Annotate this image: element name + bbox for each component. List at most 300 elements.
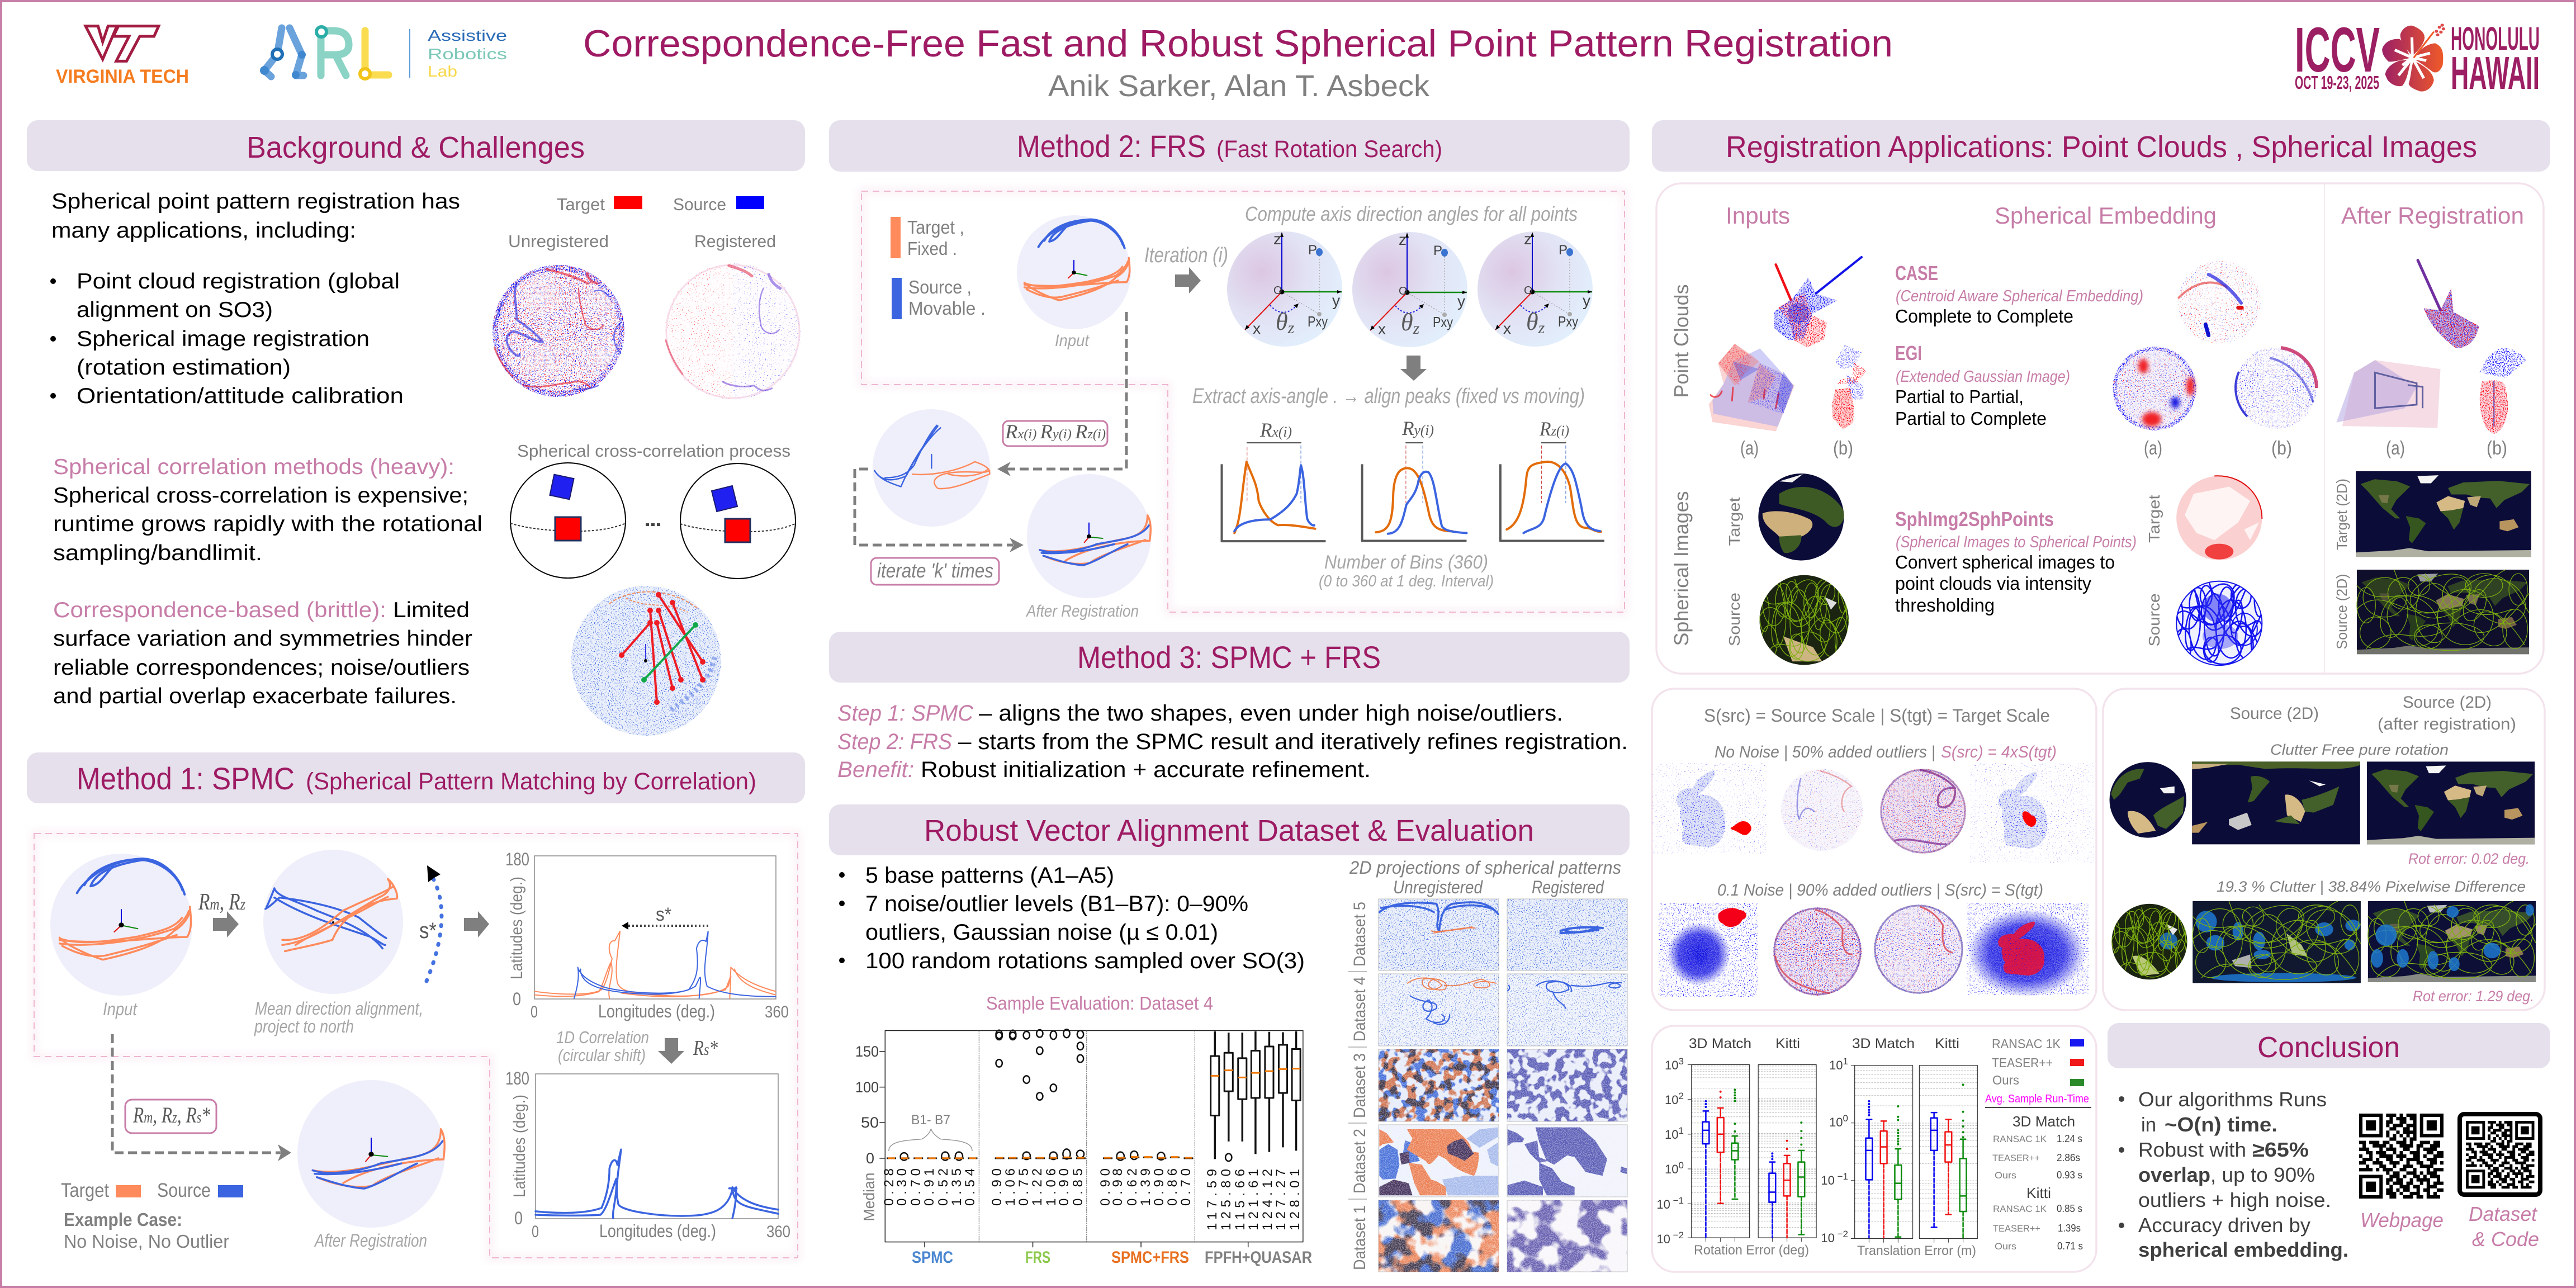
text block: spherical correlation methods: runtime grows rapidly with the rotational: [53, 512, 482, 536]
chart: longitudes after shift: Longitudes (deg.): [599, 1221, 716, 1241]
heading: method 2: Method 2: FRS: [1017, 129, 1206, 164]
CASE sphere: [2178, 261, 2261, 344]
heading: method 2: [829, 120, 1630, 172]
text block: correspondence-based: [53, 598, 472, 708]
text block: conclusion bullets: , up to 90%: [2210, 1163, 2315, 1186]
logo: Virginia Tech: [56, 26, 189, 87]
legend: target and source: Registered: [694, 231, 776, 251]
legend and run-time table: RANSAC 1K: [1993, 1134, 2047, 1144]
logo: Virginia Tech: VIRGINIA TECH: [56, 66, 189, 87]
panel: method 2 FRS: [829, 120, 1630, 621]
row 2: spheres: [1773, 905, 1963, 996]
legend and run-time table: RANSAC 1K: [1992, 1036, 2061, 1051]
axis sphere x: y: [1332, 292, 1340, 309]
heading: registration applications: [1652, 120, 2550, 172]
legend: target and source: Target: [557, 195, 605, 214]
rotation error plots: −1: [1670, 1195, 1684, 1206]
legend and example case: Example Case:: [64, 1209, 182, 1230]
column labels: [2230, 693, 2516, 733]
axis sphere z: Pxy: [1558, 313, 1578, 330]
box plot: median error by method: 0.52: [936, 1168, 951, 1206]
QR code: dataset and code: & Code: [2472, 1228, 2539, 1251]
heading: background and challenges: [27, 120, 805, 171]
heading: background and challenges: Background & Challenges: [247, 131, 585, 164]
heading: method 1: Method 1: SPMC: [77, 761, 295, 796]
panel: spherical image results: [2103, 689, 2545, 1010]
row labels: Target: [1726, 497, 1743, 546]
chart: longitudes before shift: 0: [513, 989, 521, 1009]
legend and example case: Source: [157, 1180, 211, 1201]
rotation error plots: 0: [1679, 1160, 1684, 1171]
box plot: median error by method: 150: [855, 1043, 879, 1060]
legend and run-time table: TEASER++: [1992, 1153, 2040, 1163]
logo: Assistive Robotics Lab: Assistive: [428, 27, 507, 44]
caption: noisy case: 0.1 Noise | 90% added outliers | S(src) = S(tgt): [1717, 881, 2043, 899]
arrow: down to histograms: [1400, 356, 1427, 381]
row 1: bunny input with outliers: [1652, 763, 1767, 854]
box plot: median error by method: 115.66: [1233, 1169, 1248, 1230]
box plot: median error by method: 0.30: [894, 1168, 910, 1206]
histograms of axis angles: Ry(i): [1401, 417, 1434, 439]
caption: number of bins: (0 to 360 at 1 deg. Interval): [1319, 572, 1494, 590]
text block: conclusion bullets: Our algorithms Runs: [2138, 1088, 2327, 1111]
text block: SphImg2SphPoints: thresholding: [1895, 595, 1995, 615]
histograms of axis angles: Rx(i): [1259, 419, 1292, 441]
text block: correspondence-based: reliable correspondences; noise/outliers: [53, 656, 470, 680]
legend: target and source: [508, 195, 776, 251]
rotation error plots: 10: [1665, 1162, 1679, 1176]
legend and example case: [61, 1180, 243, 1252]
sub-labels (a) and (b): (a): [2386, 438, 2405, 459]
heading: conclusion: Conclusion: [2257, 1031, 2400, 1064]
legend: target and source: Source: [673, 195, 726, 214]
legend and run-time table: RANSAC 1K: [1993, 1204, 2047, 1214]
EGI sphere (b): [2235, 347, 2317, 429]
axis sphere y: Pxy: [1433, 314, 1453, 330]
heading: robust vector alignment: Robust Vector Alignment Dataset & Evaluation: [924, 814, 1534, 847]
text block: steps: [837, 701, 1628, 782]
axis sphere y: z: [1413, 319, 1420, 338]
rot error 1.29: Rot error: 1.29 deg.: [2413, 988, 2534, 1005]
axis sphere z: y: [1583, 292, 1590, 309]
translation error plots: 10: [1821, 1231, 1835, 1245]
rotation error plots: 10: [1665, 1128, 1679, 1142]
row 2: noisy input: [1659, 903, 1758, 997]
arrow: dashed input to iteration: [997, 312, 1126, 476]
registered sphere: [665, 263, 801, 400]
axis sphere z: [1478, 230, 1593, 347]
sub-labels (a) and (b): (b): [1833, 438, 1853, 459]
translation error plots: Translation Error (m): [1857, 1243, 1976, 1258]
dataset 2 tiles: [1379, 1125, 1627, 1197]
applications frame: [1656, 183, 2544, 674]
translation error plots: −2: [1835, 1229, 1848, 1239]
dataset row labels: Dataset 3: [1351, 1053, 1369, 1118]
heading: method 3: Method 3: SPMC + FRS: [1077, 640, 1381, 675]
histograms of axis angles: [1221, 417, 1604, 541]
box plot: median error by method: FPFH+QUASAR: [1205, 1248, 1312, 1267]
caption: extract axis-angle: Extract axis-angle . → align peaks (fixed vs moving): [1192, 385, 1585, 408]
column headings: Spherical Embedding: [1995, 202, 2217, 229]
arrow: to axis spheres: [1175, 267, 1201, 293]
translation error plots: [1821, 1056, 1977, 1258]
legend and run-time table: 0.85 s: [2057, 1203, 2082, 1214]
legend: target fixed, source movable: Target ,: [907, 217, 964, 238]
dataset 3 tiles: [1379, 1049, 1627, 1121]
row 2: noisy bunny registered: [1967, 903, 2089, 997]
arrow: to correlation plot: [464, 911, 489, 937]
rotation error plots: 10: [1656, 1197, 1670, 1211]
axis sphere x: z: [1287, 319, 1295, 337]
QR code: dataset and code: Dataset: [2469, 1202, 2538, 1225]
dataset row labels: Dataset 4: [1351, 977, 1369, 1041]
row labels: Source: [1726, 593, 1743, 646]
axis sphere y: P: [1433, 243, 1442, 258]
column headings: After Registration: [2341, 202, 2524, 229]
cluttered registered map: [2368, 899, 2536, 983]
logo: ICCV 2025: OCT 19-23, 2025: [2295, 72, 2379, 93]
arrow: to mean alignment: [213, 911, 239, 937]
histograms of axis angles: Rz(i): [1539, 418, 1569, 440]
label: 1D correlation circular shift: (circular shift): [558, 1045, 646, 1065]
spherical cross-correlation diagram: Spherical cross-correlation process: [517, 441, 790, 461]
text block: dataset bullets: 100 random rotations sampled over SO(3): [865, 949, 1305, 973]
box plot: median error by method: 0.28: [882, 1168, 897, 1206]
box plot: median error by method: Median: [860, 1173, 878, 1221]
legend and run-time table: [1985, 1036, 2091, 1252]
box plot: median error by method: 117.59: [1205, 1169, 1220, 1230]
box plot: median error by method: FRS: [1025, 1248, 1050, 1267]
text block: SphImg2SphPoints: [1895, 508, 2137, 615]
text block: conclusion bullets: spherical embedding.: [2138, 1238, 2348, 1261]
chart title: Sample Evaluation: Dataset 4: [986, 993, 1213, 1014]
legend and run-time table: Ours: [1995, 1170, 2016, 1181]
box plot: median error by method: 0: [866, 1150, 874, 1167]
frame: [1652, 689, 2096, 1010]
text block: dataset bullets: 7 noise/outlier levels (B1–B7): 0–90%: [865, 892, 1248, 916]
row labels: Spherical Images: [1670, 491, 1693, 646]
row labels: Target (2D): [2333, 479, 2350, 550]
legend and run-time table: 3D Match: [2012, 1113, 2075, 1130]
text block: spherical correlation methods: sampling/bandlimit.: [53, 541, 262, 565]
text block: dataset bullets: 5 base patterns (A1–A5): [865, 863, 1114, 888]
heading: registration applications: Registration Applications: Point Clouds , Spherical Images: [1726, 130, 2477, 164]
text block: CASE: (Centroid Aware Spherical Embedding): [1896, 287, 2143, 305]
translation error plots: 10: [1829, 1058, 1843, 1072]
panel: background and challenges: [27, 120, 805, 736]
caption: 2D projections: [1349, 858, 1621, 897]
box plot: median error by method: 127.27: [1273, 1169, 1289, 1230]
text block: steps: Benefit:: [837, 757, 914, 782]
text block: steps: Robust initialization + accurate refinement.: [921, 757, 1371, 782]
after registration sphere: After Registration: [314, 1230, 427, 1251]
legend and run-time table: Avg. Sample Run-Time: [1985, 1093, 2089, 1105]
logo: Assistive Robotics Lab: [260, 27, 507, 80]
axis sphere z: P: [1559, 243, 1568, 258]
box plot: median error by method: 1.39: [1138, 1168, 1153, 1206]
row 1: spheres unregistered and registered: [1781, 769, 1966, 854]
rotation error plots: 3: [1679, 1056, 1684, 1067]
axis sphere x: [1227, 230, 1342, 347]
heading: method 1: (Spherical Pattern Matching by Correlation): [306, 768, 756, 795]
caption: clutter free: Clutter Free pure rotation: [2270, 741, 2449, 758]
input sphere: Input: [1055, 332, 1090, 350]
dashed process frame: [861, 191, 1625, 612]
rotation error plots: 10: [1665, 1093, 1679, 1107]
axis sphere z: θ: [1526, 308, 1538, 335]
text block: spherical correlation methods: [53, 455, 482, 565]
box plot: median error by method: 0.70: [1178, 1168, 1194, 1206]
text block: conclusion bullets: outliers + high noise.: [2138, 1188, 2331, 1211]
chart: longitudes before shift: Longitudes (deg.): [598, 1001, 715, 1021]
axis sphere z: z: [1538, 319, 1545, 337]
legend: target fixed, source movable: Source ,: [908, 277, 972, 297]
text block: steps: – starts from the SPMC result and iteratively refines registration.: [958, 730, 1628, 754]
QR code: dataset and code: [2460, 1114, 2540, 1251]
logo: Assistive Robotics Lab: Lab: [428, 63, 457, 80]
correspondence sphere with red and green match lines: [571, 586, 721, 736]
text block: CASE: Complete to Complete: [1895, 306, 2073, 326]
cluttered rotated map: [2193, 899, 2361, 983]
text block: conclusion bullets: ≥65%: [2252, 1138, 2309, 1161]
text block: correspondence-based: Limited: [393, 598, 470, 622]
panel: dataset and evaluation: [829, 804, 1630, 1272]
legend: target fixed, source movable: [891, 217, 986, 319]
text block: spherical correlation methods: Spherical cross-correlation is expensive;: [53, 484, 468, 508]
QR code: webpage: [2359, 1115, 2444, 1232]
box plot: median error by method: SPMC+FRS: [1111, 1248, 1189, 1267]
rot error 0.02: Rot error: 0.02 deg.: [2408, 850, 2530, 867]
box plot: median error by method: 50: [861, 1114, 879, 1131]
text block: conclusion bullets: in: [2141, 1113, 2156, 1136]
chart: longitudes after shift: Latitudes (deg.): [510, 1095, 529, 1197]
cluttered globe: [2111, 902, 2187, 981]
text block: correspondence-based: and partial overlap exacerbate failures.: [53, 684, 457, 708]
clutter-free registered map: [2367, 761, 2535, 844]
box: Rm, Rz, Rs*: Rm, Rz, Rs*: [132, 1102, 210, 1128]
box plot: median error by method: 124.12: [1260, 1169, 1275, 1230]
legend and run-time table: TEASER++: [1993, 1223, 2040, 1234]
dashed process frame: [34, 834, 798, 1258]
input sphere: Input: [103, 999, 138, 1019]
mean direction alignment sphere: Mean direction alignment,: [255, 998, 423, 1019]
logo: ICCV 2025: [2295, 15, 2540, 99]
text block: applications: alignment on SO3): [77, 298, 273, 322]
registered point clouds: guitar, room, vase: [2336, 261, 2527, 434]
clutter-free rotated map: [2192, 761, 2360, 844]
mean direction alignment sphere: [254, 850, 423, 1036]
box plot: median error by method: 0.90: [1098, 1168, 1113, 1206]
chart: longitudes before shift: Latitudes (deg.): [508, 877, 526, 979]
caption: no noise case: S(src) = 4xS(tgt): [1941, 743, 2057, 761]
box plot: median error by method: 0.86: [1165, 1168, 1180, 1206]
input globe: target: [1758, 473, 1845, 561]
text block: steps: Step 1: SPMC: [837, 701, 974, 726]
panel: method 1 SPMC: [27, 752, 805, 1258]
axis sphere y: [1352, 231, 1467, 347]
text block: EGI: Partial to Complete: [1895, 408, 2047, 429]
box plot: median error by method: 0.90: [1057, 1168, 1072, 1206]
legend and run-time table: 1.24 s: [2057, 1133, 2082, 1144]
input sphere: [1017, 215, 1131, 350]
text block: applications: Orientation/attitude calibration: [77, 384, 404, 408]
legend and run-time table: 0.93 s: [2057, 1169, 2082, 1181]
text block: SphImg2SphPoints: point clouds via intensity: [1895, 573, 2091, 594]
row labels: Point Clouds: [1670, 284, 1693, 398]
sub-labels (a) and (b): (b): [2271, 438, 2292, 459]
title: Correspondence-Free Fast and Robust Spherical Point Pattern Registration: [583, 22, 1893, 65]
legend and example case: Target: [61, 1180, 109, 1201]
input sphere: [50, 854, 192, 1019]
text block: steps: Step 2: FRS: [837, 730, 952, 754]
chart: longitudes after shift: 360: [766, 1223, 790, 1241]
box plot: median error by method: 0.54: [963, 1168, 978, 1206]
mean direction alignment sphere: project to north: [254, 1016, 354, 1036]
legend and run-time table: 0.71 s: [2057, 1240, 2083, 1252]
box plot: median error by method: 128.01: [1287, 1169, 1303, 1230]
row labels: Target: [2146, 495, 2163, 543]
dataset row labels: Dataset 2: [1351, 1129, 1369, 1194]
box plot: median error by method: 0.90: [1152, 1168, 1167, 1206]
panel: scale experiments: [1652, 689, 2096, 1010]
heading: method 1: [27, 752, 805, 803]
text block: applications: Point cloud registration (global: [77, 269, 400, 293]
column headings: Inputs: [1726, 202, 1790, 229]
axis sphere y: z: [1399, 231, 1407, 248]
QR code: webpage: Webpage: [2360, 1209, 2444, 1232]
box plot: median error by method: 0.70: [908, 1168, 924, 1206]
text block: dataset bullets: outliers, Gaussian noise (µ ≤ 0.01): [865, 920, 1218, 945]
dataset 4 tiles: [1379, 974, 1627, 1046]
legend and run-time table: Kitti: [2026, 1185, 2051, 1201]
rotation error plots: [1656, 1056, 1816, 1258]
box plot: median error by method: 0.98: [1110, 1168, 1125, 1206]
chart: longitudes before shift: 180: [505, 849, 529, 869]
box: iterate k times: iterate 'k' times: [877, 559, 993, 582]
input point clouds: guitar, room, vase: [1709, 257, 1866, 432]
rotation error plots: Rotation Error (deg): [1694, 1243, 1809, 1258]
box plot: median error by method: 125.80: [1219, 1169, 1234, 1230]
plot titles: 3D Match: [1689, 1036, 1751, 1052]
text block: conclusion bullets: overlap: [2138, 1163, 2210, 1186]
panel: registration applications: [1652, 120, 2550, 674]
axis sphere x: z: [1273, 230, 1281, 248]
axis sphere x: O: [1273, 285, 1282, 297]
text block: conclusion bullets: ~O(n) time.: [2165, 1113, 2277, 1136]
plot titles: Kitti: [1935, 1036, 1959, 1052]
axis sphere z: O: [1524, 285, 1533, 297]
chart: longitudes before shift: 0: [531, 1003, 538, 1021]
row labels: [1670, 284, 2350, 650]
text block: conclusion bullets: Accuracy driven by: [2138, 1214, 2310, 1237]
sub-labels (a) and (b): [1740, 438, 2507, 459]
rotation error plots: −2: [1670, 1230, 1684, 1240]
row labels: Source (2D): [2333, 574, 2350, 650]
text block: EGI: EGI: [1895, 342, 1922, 364]
chart: longitudes before shift: 360: [765, 1003, 789, 1021]
text block: dataset bullets: [839, 863, 1305, 973]
axis sphere x: P: [1308, 243, 1317, 258]
dataset row labels: Dataset 1: [1351, 1205, 1369, 1270]
axis sphere x: x: [1253, 320, 1261, 337]
text block: CASE: [1895, 262, 2143, 326]
arrow: dashed iterate loop: [855, 469, 1024, 552]
text block: correspondence-based: Correspondence-based (brittle):: [53, 598, 386, 622]
text block: applications: [50, 190, 460, 408]
legend and run-time table: 2.86s: [2057, 1152, 2080, 1163]
arrow: dashed to result: [112, 1034, 291, 1161]
after registration sphere: [297, 1080, 445, 1251]
axis sphere z: z: [1524, 230, 1532, 248]
dataset 1 tiles: [1379, 1200, 1627, 1272]
caption: no noise case: [1715, 743, 2057, 761]
authors: Anik Sarker, Alan T. Asbeck: [1048, 69, 1430, 103]
translation error plots: −1: [1835, 1171, 1848, 1182]
label: 1D correlation circular shift: [556, 1027, 718, 1065]
panel: method 3: [829, 632, 1630, 782]
caption: 2D projections: Registered: [1532, 877, 1604, 897]
caption: number of bins: [1319, 552, 1494, 590]
plot titles: 3D Match: [1852, 1036, 1915, 1052]
input globe: source with clutter: [1759, 573, 1849, 666]
text block: SphImg2SphPoints: (Spherical Images to Spherical Points): [1896, 533, 2137, 551]
axis sphere x: θ: [1276, 308, 1288, 335]
chart: longitudes after shift: 0: [532, 1223, 539, 1241]
chart: longitudes after shift: 0: [514, 1208, 523, 1228]
target 2D map: [2356, 471, 2531, 557]
legend: target fixed, source movable: Fixed .: [907, 238, 957, 259]
legend and run-time table: TEASER++: [1992, 1055, 2053, 1070]
dataset 5 tiles: [1379, 899, 1627, 970]
caption: 2D projections: 2D projections of spherical patterns: [1349, 858, 1621, 878]
heading: method 3: [829, 632, 1630, 683]
text block: SphImg2SphPoints: Convert spherical images to: [1895, 552, 2115, 572]
axis sphere y: O: [1399, 285, 1408, 297]
heading: conclusion: [2108, 1023, 2550, 1068]
logo: ICCV 2025: ICCV: [2295, 15, 2380, 85]
axis sphere y: y: [1457, 292, 1465, 310]
axis sphere x: Pxy: [1308, 313, 1328, 330]
label: iteration: Iteration (i): [1144, 244, 1228, 267]
axis sphere y: θ: [1401, 309, 1413, 336]
legend: target and source: Unregistered: [508, 231, 609, 251]
text block: EGI: (Extended Gaussian Image): [1896, 368, 2070, 386]
caption: no noise case: No Noise | 50% added outliers |: [1715, 743, 1935, 761]
text block: CASE: CASE: [1895, 262, 1938, 285]
chart: longitudes after shift: [505, 1068, 790, 1241]
box plot: median error by method: [855, 1029, 1312, 1267]
column labels: (after registration): [2378, 715, 2516, 733]
chart: longitudes before shift: s*: [656, 904, 671, 925]
sub-labels (a) and (b): (a): [2144, 438, 2162, 459]
text block: SphImg2SphPoints: SphImg2SphPoints: [1895, 508, 2054, 531]
text block: steps: – aligns the two shapes, even under high noise/outliers.: [979, 701, 1563, 726]
panel: benchmark box plots: [1652, 1026, 2096, 1272]
translation error plots: 10: [1829, 1115, 1843, 1129]
text block: applications: many applications, including:: [51, 219, 356, 243]
text block: EGI: Partial to Partial,: [1895, 386, 2024, 407]
box plot: median error by method: 1.06: [1003, 1168, 1018, 1206]
logo: Assistive Robotics Lab: Robotics: [428, 45, 507, 63]
legend and run-time table: Ours: [1992, 1073, 2019, 1087]
rotation error plots: 10: [1665, 1058, 1679, 1072]
dataset row labels: Dataset 5: [1351, 902, 1369, 967]
frame: [2103, 689, 2545, 1010]
row 1: bunny registered: [1970, 763, 2094, 863]
column labels: Source (2D): [2230, 704, 2319, 723]
box plot: median error by method: 0.62: [1125, 1168, 1140, 1206]
target spherical points: [2176, 476, 2262, 560]
